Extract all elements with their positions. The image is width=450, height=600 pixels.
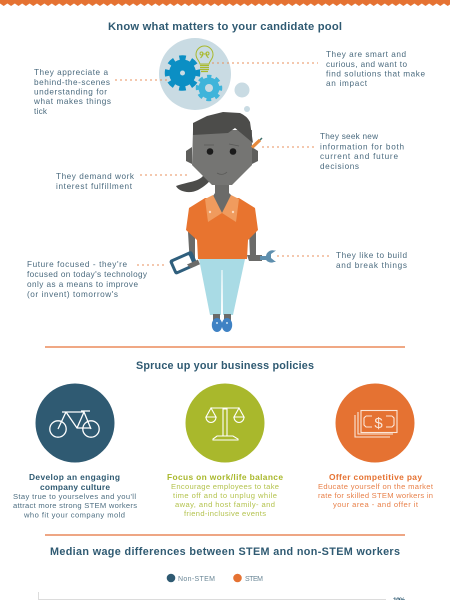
- callout: behind the scenes: what makes things: [33, 97, 111, 106]
- callout: new information: [262, 132, 404, 171]
- callout: smart and curious: [212, 50, 425, 88]
- text block: company culture: company culture: [40, 482, 110, 492]
- top zigzag border: [0, 0, 450, 7]
- legend: STEM: [245, 576, 263, 583]
- callout: build and break: and break things: [336, 261, 407, 270]
- callout: future focused: [27, 260, 165, 299]
- callout: work interest: interest fulfillment: [56, 182, 133, 191]
- icon: scales: [186, 384, 264, 462]
- legs: [199, 259, 245, 315]
- callout: smart and curious: curious, and want to: [326, 60, 407, 69]
- callout: future focused: only as a means to improve: [27, 280, 138, 289]
- text block: company culture: [13, 472, 137, 520]
- icon: money: [336, 384, 414, 462]
- hair: [193, 112, 253, 143]
- title: candidate pool: Know what matters to your candidate pool: [108, 21, 342, 33]
- callout: smart and curious: an impact: [326, 79, 368, 88]
- callout: work interest: They demand work: [56, 172, 135, 181]
- phone: [169, 250, 200, 275]
- callout: work interest: [56, 172, 190, 191]
- callout: new information: They seek new: [320, 132, 378, 141]
- text block: work/life balance: friend-inclusive events: [184, 509, 266, 518]
- callout: behind the scenes: tick: [34, 107, 48, 116]
- callout: behind the scenes: behind-the-scenes: [34, 78, 110, 87]
- arms: [188, 232, 256, 266]
- shirt: [186, 198, 258, 259]
- icon: money: $: [374, 415, 383, 432]
- text block: work/life balance: away, and host family- and: [175, 500, 275, 509]
- icon: light bulb: [196, 46, 213, 72]
- pencil: [252, 138, 262, 148]
- text block: work/life balance: [167, 472, 283, 518]
- mouth and brows: [204, 144, 239, 174]
- callout: new information: information for both: [320, 142, 404, 152]
- face: [192, 130, 252, 185]
- text block: competitive pay: [318, 472, 434, 509]
- text block: work/life balance: time off and to unplug while: [173, 491, 277, 500]
- text block: competitive pay: rate for skilled STEM workers in: [318, 491, 433, 500]
- callout: smart and curious: They are smart and: [326, 50, 406, 59]
- callout: future focused: Future focused - they're: [27, 260, 127, 269]
- text block: work/life balance: Focus on work/life balance: [167, 472, 283, 482]
- callout: future focused: focused on today's technology: [27, 270, 148, 279]
- text block: competitive pay: Educate yourself on the market: [318, 482, 434, 491]
- text block: company culture: Stay true to yourselves and you'll: [13, 492, 136, 501]
- neck: [213, 180, 232, 213]
- person figure: [169, 112, 276, 332]
- callout: behind the scenes: understanding for: [34, 88, 107, 96]
- text block: work/life balance: Encourage employees to take: [171, 482, 279, 491]
- wrench: [247, 250, 276, 263]
- callout: behind the scenes: They appreciate a: [34, 68, 108, 77]
- callout: smart and curious: find solutions that make: [326, 70, 425, 78]
- ponytail: [176, 172, 213, 192]
- callout: behind the scenes: [33, 68, 168, 116]
- text block: company culture: Develop an engaging: [29, 472, 120, 482]
- text block: company culture: who fit your company mold: [23, 510, 125, 520]
- text block: competitive pay: your area - and offer it: [333, 500, 419, 509]
- icon: bicycle: [36, 384, 114, 462]
- text block: company culture: attract more strong STEM workers: [13, 501, 137, 510]
- callout: build and break: [277, 251, 407, 270]
- legend: Non-STEM: [178, 576, 215, 583]
- eyes: [207, 148, 213, 155]
- heading: business policies: Spruce up your business policies: [136, 360, 314, 372]
- icon: large gear: [168, 58, 198, 88]
- callout: new information: decisions: [320, 162, 359, 171]
- callout: future focused: (or invent) tomorrow's: [27, 290, 118, 299]
- callout: new information: current and future: [320, 152, 398, 161]
- heading: median wage differences: Median wage differences between STEM and non-STEM workers: [50, 546, 400, 558]
- callout: build and break: They like to build: [336, 251, 407, 260]
- ankles: [213, 314, 231, 321]
- collar: [205, 195, 239, 222]
- icon: small gear: [198, 77, 220, 99]
- ears: [186, 147, 258, 164]
- legend: [167, 574, 263, 583]
- thought bubble with gears and bulb: [159, 38, 250, 112]
- text block: competitive pay: Offer competitive pay: [329, 472, 422, 482]
- shoes: [212, 318, 232, 332]
